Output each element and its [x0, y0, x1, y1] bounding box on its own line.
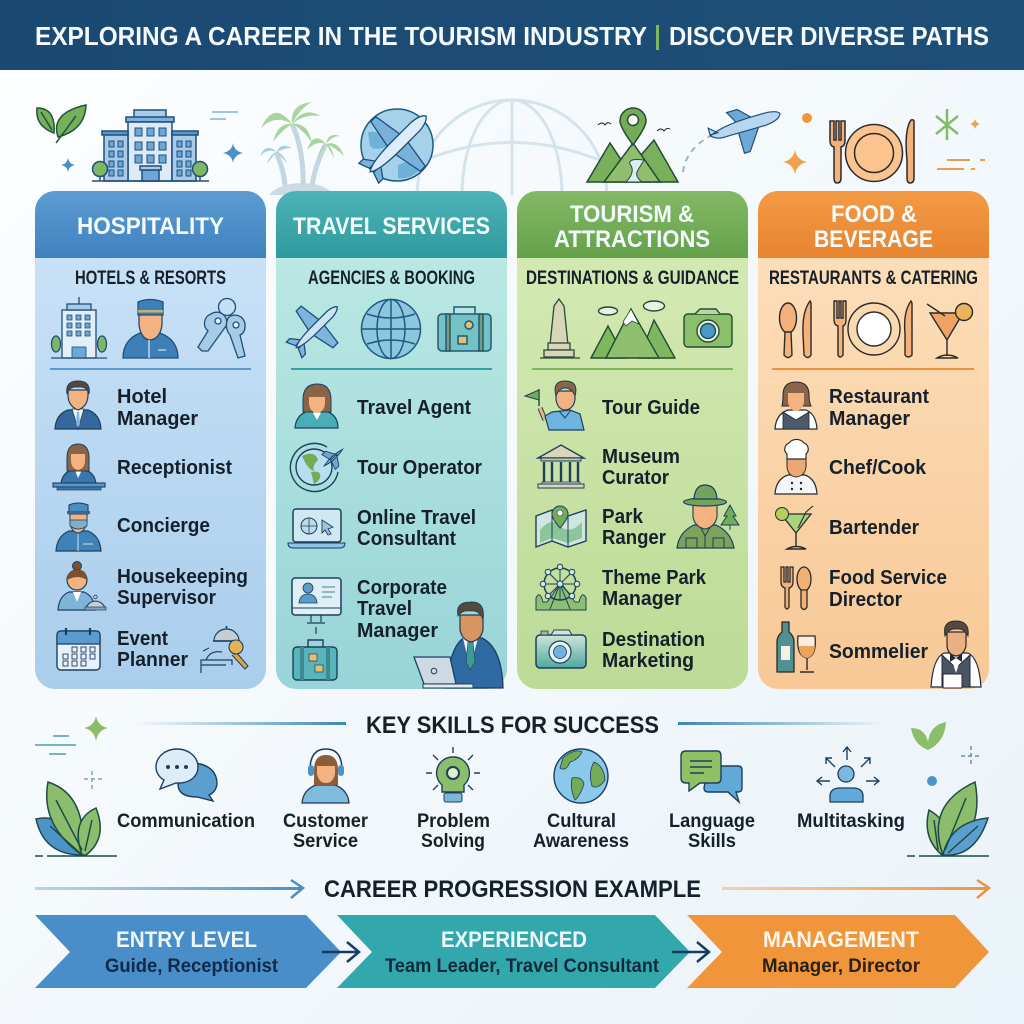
subheading: destinations: DESTINATIONS & GUIDANCE [526, 267, 739, 289]
item: museum curator [538, 445, 680, 489]
icon: sparkles right [783, 109, 985, 174]
icon: suitcase [438, 307, 491, 351]
chevron: management: MANAGEMENT [763, 927, 920, 952]
skill: communication [117, 749, 255, 832]
chevron: entry level: Guide, Receptionist [105, 956, 279, 977]
item: online travel consultant [288, 506, 476, 550]
chevron: management: Manager, Director [762, 956, 921, 977]
icon: globe [362, 300, 420, 358]
icon: plane top right [683, 98, 788, 172]
icon: hotel building [92, 110, 209, 181]
icon: place setting top right [830, 120, 914, 183]
chevron: management [687, 915, 989, 988]
item: park ranger: Ranger [602, 526, 666, 549]
heading: tourism and attractions [554, 201, 710, 253]
chevron: experienced [337, 915, 690, 988]
icon: plane [276, 288, 356, 368]
item: online travel consultant: Online Travel [357, 506, 476, 529]
skill: language skills: Language [669, 811, 755, 832]
icon: plane over globe [344, 91, 451, 198]
item: tour operator: Tour Operator [357, 456, 482, 479]
skill: customer service [283, 749, 369, 852]
skill: customer service: Service [293, 831, 358, 852]
item: restaurant manager [775, 382, 929, 430]
skill: language skills: Skills [688, 831, 736, 852]
panel: travel services [276, 191, 507, 689]
skill: communication: Communication [117, 811, 255, 832]
item: travel agent [295, 384, 471, 428]
skill: cultural awareness: Awareness [533, 831, 629, 852]
item: food service director [781, 566, 947, 611]
item: destination marketing: Marketing [602, 649, 694, 672]
heading: key skills [135, 712, 885, 739]
item: sommelier: Sommelier [829, 640, 928, 663]
subheading: hotels: HOTELS & RESORTS [75, 267, 226, 289]
item: museum curator: Curator [602, 466, 669, 489]
item: corporate travel manager: Corporate [357, 576, 447, 599]
icon: cutlery and plate [780, 301, 912, 358]
item: park ranger: Park [602, 505, 644, 528]
item: event planner: Event [117, 627, 168, 650]
title bar [0, 0, 1024, 70]
icon: camera [684, 309, 732, 347]
heading: hospitality: HOSPITALITY [77, 213, 224, 240]
title bar: EXPLORING A CAREER IN THE TOURISM INDUSTRY [35, 21, 647, 51]
subheading: agencies: AGENCIES & BOOKING [308, 267, 475, 289]
item: tour operator [290, 442, 482, 491]
item: theme park manager [536, 564, 707, 610]
icon: small hotel [51, 297, 107, 358]
item: housekeeping supervisor [58, 562, 248, 610]
icon: plant left with sparkle [35, 716, 117, 856]
panel: tourism and attractions [517, 191, 748, 689]
item: corporate travel manager: Manager [357, 619, 438, 642]
panel: food and beverage [758, 191, 989, 689]
heading: career progression: CAREER PROGRESSION EXAMPLE [324, 876, 701, 903]
item: receptionist: Receptionist [117, 456, 232, 479]
item: concierge: Concierge [117, 514, 210, 537]
skill: customer service: Customer [283, 811, 369, 832]
item: food service director: Director [829, 588, 902, 611]
heading: food and beverage: BEVERAGE [814, 226, 933, 253]
item: restaurant manager: Manager [829, 407, 910, 430]
skill: problem solving: Solving [421, 831, 485, 852]
icon: mountains [591, 301, 675, 358]
item: bartender [776, 506, 919, 549]
item: hotel manager: Manager [117, 407, 198, 430]
skill: problem solving [417, 747, 490, 852]
heading: key skills: KEY SKILLS FOR SUCCESS [366, 712, 659, 739]
item: receptionist [53, 444, 232, 490]
item: chef: Chef/Cook [829, 456, 927, 479]
skill: cultural awareness [533, 749, 629, 852]
item: sommelier [777, 621, 981, 688]
arrow: entry to experienced [322, 942, 359, 962]
item: destination marketing: Destination [602, 628, 705, 651]
chevron: experienced: Team Leader, Travel Consultant [385, 956, 660, 977]
item: tour guide: Tour Guide [602, 396, 700, 419]
heading: career progression [35, 876, 989, 903]
icon: leaves top left [37, 105, 86, 143]
item: housekeeping supervisor: Housekeeping [117, 565, 248, 588]
heading: tourism and attractions: ATTRACTIONS [554, 226, 710, 253]
item: museum curator: Museum [602, 445, 680, 468]
chevron: entry level: ENTRY LEVEL [116, 927, 257, 952]
item: corporate travel manager [292, 576, 503, 688]
item: travel agent: Travel Agent [357, 396, 471, 419]
item: hotel manager: Hotel [117, 385, 167, 408]
chevron: entry level [35, 915, 341, 988]
icon: cocktail [927, 304, 972, 358]
item: destination marketing [536, 628, 705, 672]
item: chef [775, 439, 927, 494]
skill: problem solving: Problem [417, 811, 490, 832]
backdrop globe and palms [260, 98, 608, 195]
icon: pin and mountains [587, 108, 678, 182]
icon: keys [198, 298, 245, 358]
item: tour guide [525, 381, 700, 430]
item: theme park manager: Manager [602, 587, 682, 610]
item: theme park manager: Theme Park [602, 566, 707, 589]
item: online travel consultant: Consultant [357, 527, 456, 550]
heading: food and beverage: FOOD & [831, 201, 917, 228]
heading: food and beverage [814, 201, 933, 253]
item: concierge [56, 503, 210, 551]
arrow: experienced to management [672, 942, 709, 962]
panel: hospitality [35, 191, 266, 689]
icon: bellhop [123, 300, 178, 358]
skill: cultural awareness: Cultural [547, 811, 616, 832]
item: corporate travel manager: Travel [357, 597, 412, 620]
item: hotel manager [55, 381, 198, 430]
skill: multitasking [797, 747, 905, 832]
icon: sparkles left [61, 112, 243, 172]
item: bartender: Bartender [829, 516, 919, 539]
item: housekeeping supervisor: Supervisor [117, 586, 216, 609]
skill: multitasking: Multitasking [797, 811, 905, 832]
item: event planner [57, 626, 248, 673]
heading: travel services: TRAVEL SERVICES [293, 213, 490, 240]
skill: language skills [669, 751, 755, 852]
icon: plant right [907, 722, 989, 856]
item: restaurant manager: Restaurant [829, 385, 929, 408]
item: event planner: Planner [117, 648, 188, 671]
icon: obelisk [540, 299, 580, 358]
title bar: DISCOVER DIVERSE PATHS [669, 21, 989, 51]
item: park ranger [536, 485, 739, 549]
item: food service director: Food Service [829, 566, 947, 589]
chevron: experienced: EXPERIENCED [441, 927, 587, 952]
heading: tourism and attractions: TOURISM & [570, 201, 694, 228]
